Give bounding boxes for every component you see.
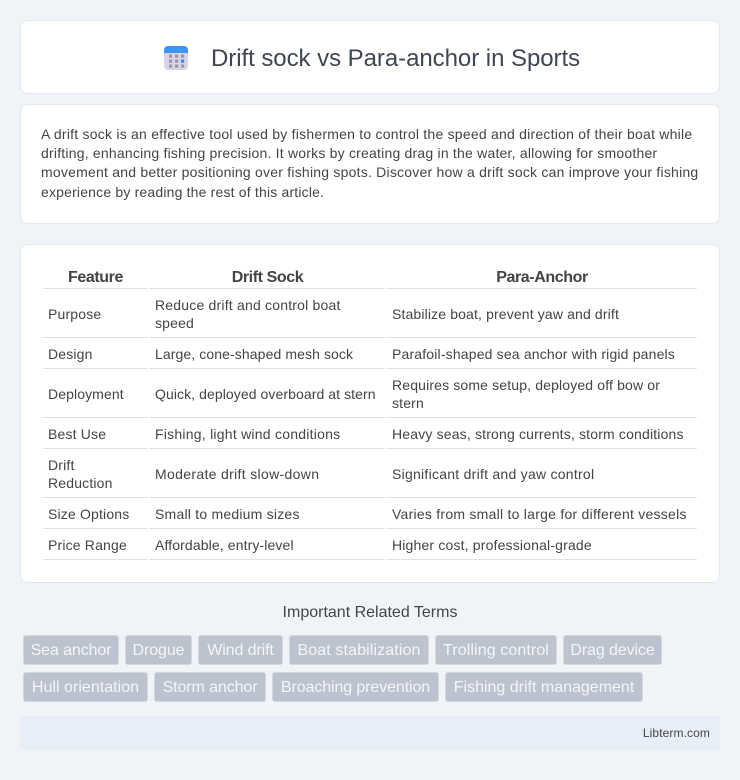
row: drift reduction: Moderate drift slow-down <box>155 466 319 482</box>
row: design: Parafoil-shaped sea anchor with rigid panels <box>392 346 675 362</box>
row: design: Large, cone-shaped mesh sock <box>155 346 353 362</box>
tags: related terms: Broaching prevention <box>281 679 430 696</box>
row: drift reduction: Significant drift and yaw control <box>392 466 594 482</box>
row: best use: Heavy seas, strong currents, storm conditions <box>392 426 684 442</box>
intro paragraph: drifting, enhancing fishing precision. It works by creating drag in the water, allowing for smoother <box>41 145 657 161</box>
row: size options <box>48 506 687 522</box>
tags: related terms <box>23 635 662 702</box>
tags: related terms: Drogue <box>133 642 184 659</box>
row: design: Design <box>48 346 93 362</box>
row: drift reduction: Reduction <box>48 475 113 491</box>
tags: related terms: Wind drift <box>207 642 274 659</box>
table header <box>68 269 588 286</box>
row: deployment: stern <box>392 395 424 411</box>
row: best use <box>48 426 684 442</box>
row: purpose <box>48 297 619 331</box>
row: purpose: speed <box>155 315 194 331</box>
row: best use: Fishing, light wind conditions <box>155 426 340 442</box>
tags: related terms: Trolling control <box>443 642 549 659</box>
row: drift reduction <box>48 457 594 491</box>
tags: related terms: Sea anchor <box>31 642 111 659</box>
row: purpose: Reduce drift and control boat <box>155 297 341 313</box>
tags: related terms: Fishing drift management <box>454 679 634 696</box>
intro paragraph: movement and better positioning over fishing spots. Discover how a drift sock can improve your fishing <box>41 164 698 180</box>
row: size options: Varies from small to large for different vessels <box>392 506 687 522</box>
table header: Drift Sock <box>232 269 303 286</box>
row: deployment <box>48 377 660 411</box>
tags: related terms: Hull orientation <box>32 679 139 696</box>
panel: intro text <box>20 104 720 224</box>
row: design <box>48 346 675 362</box>
heading: related terms: Important Related Terms <box>283 604 457 621</box>
row: purpose: Purpose <box>48 306 101 322</box>
table header: Para-Anchor <box>496 269 588 286</box>
comparison table <box>43 269 697 560</box>
icon: calendar <box>164 46 188 70</box>
row: best use: Best Use <box>48 426 106 442</box>
panel: comparison table <box>20 244 720 583</box>
row: drift reduction: Drift <box>48 457 75 473</box>
row: purpose: Stabilize boat, prevent yaw and drift <box>392 306 619 322</box>
footer credit: Libterm.com <box>643 726 710 740</box>
row: deployment: Deployment <box>48 386 124 402</box>
tags: related terms: Boat stabilization <box>297 642 421 659</box>
row: size options: Small to medium sizes <box>155 506 300 522</box>
title: Drift sock vs Para-anchor in Sports <box>211 45 580 72</box>
intro paragraph: A drift sock is an effective tool used by fishermen to control the speed and direction of their boat while <box>41 126 692 142</box>
row: price range: Affordable, entry-level <box>155 537 294 553</box>
table header: Feature <box>68 269 123 286</box>
row: deployment: Quick, deployed overboard at stern <box>155 386 376 402</box>
footer bar <box>20 716 720 750</box>
panel: title card <box>20 20 720 94</box>
row: size options: Size Options <box>48 506 129 522</box>
tags: related terms: Drag device <box>570 642 655 659</box>
row: price range: Price Range <box>48 537 127 553</box>
intro paragraph: experience by reading the rest of this article. <box>41 184 324 200</box>
row: price range <box>48 537 592 553</box>
row: deployment: Requires some setup, deployed off bow or <box>392 377 660 393</box>
tags: related terms: Storm anchor <box>163 679 257 696</box>
row: price range: Higher cost, professional-grade <box>392 537 592 553</box>
intro paragraph <box>41 126 698 200</box>
